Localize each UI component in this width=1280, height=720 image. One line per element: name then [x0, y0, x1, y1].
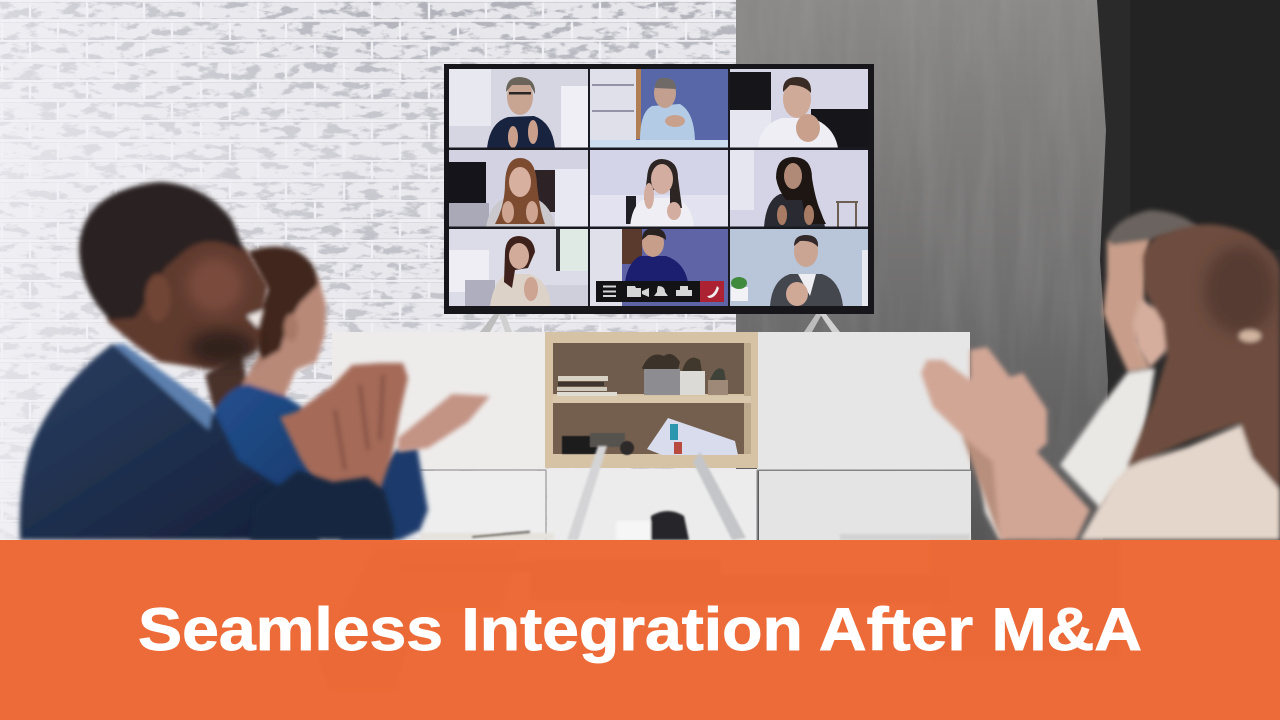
- ear: [284, 314, 298, 342]
- video tile 5: [590, 150, 729, 227]
- blue top: [210, 384, 330, 500]
- tv stand feet: [480, 314, 840, 332]
- cream top: [1080, 423, 1280, 540]
- video tile 8: [590, 228, 729, 306]
- hair: [248, 246, 318, 360]
- title: Seamless Integration After M&A: [138, 596, 1142, 663]
- binoculars: [562, 433, 634, 455]
- hair: [1107, 210, 1200, 245]
- books: [557, 376, 617, 396]
- video tile 4: [449, 150, 588, 227]
- man on left: [20, 182, 320, 540]
- face: [1103, 236, 1150, 372]
- video tile 9: [730, 229, 868, 306]
- video tile 7: [449, 229, 588, 306]
- right clapping hands: [921, 347, 1090, 540]
- video tile 2: [590, 69, 729, 148]
- ear: [145, 274, 171, 322]
- far sleeve: [340, 447, 428, 540]
- concrete wall: [736, 0, 1116, 540]
- white shirt: [1060, 368, 1155, 508]
- mug: [616, 521, 662, 540]
- desk items: [420, 446, 970, 540]
- hair strand: [205, 350, 250, 415]
- man on right: [978, 210, 1200, 540]
- shirt collar: [113, 344, 213, 430]
- neck and face: [100, 205, 268, 370]
- beard: [188, 330, 256, 366]
- right laptop: [693, 452, 746, 540]
- orange banner: [0, 540, 1280, 720]
- video tile 1: [449, 69, 588, 148]
- call controls toolbar: [596, 281, 724, 302]
- dark brick column: [1097, 0, 1280, 540]
- paper stack: [647, 418, 738, 455]
- far hand: [398, 394, 490, 452]
- video tile 6: [730, 150, 868, 227]
- woman on left: [205, 246, 428, 540]
- smile: [247, 310, 264, 328]
- television video call: [444, 64, 874, 314]
- hair shadow: [1204, 246, 1276, 334]
- plant pots: [642, 354, 728, 395]
- hair: [79, 182, 245, 320]
- sideboard: [332, 332, 971, 540]
- notebook: [420, 533, 554, 540]
- navy suit: [20, 344, 320, 540]
- near clapping hands: [280, 363, 408, 490]
- shelf unit: [545, 332, 758, 468]
- cheek highlight: [187, 257, 243, 313]
- banner reflection: [318, 540, 1120, 690]
- hair tie: [1239, 330, 1261, 342]
- near sleeve: [250, 470, 394, 540]
- brick wall: [0, 0, 737, 540]
- neck and face: [242, 275, 326, 398]
- video tile 3: [730, 69, 868, 148]
- hair: [1127, 224, 1280, 490]
- face: [1133, 298, 1170, 368]
- left laptop: [567, 446, 607, 540]
- woman on right: [1080, 224, 1280, 540]
- black bag: [651, 511, 689, 540]
